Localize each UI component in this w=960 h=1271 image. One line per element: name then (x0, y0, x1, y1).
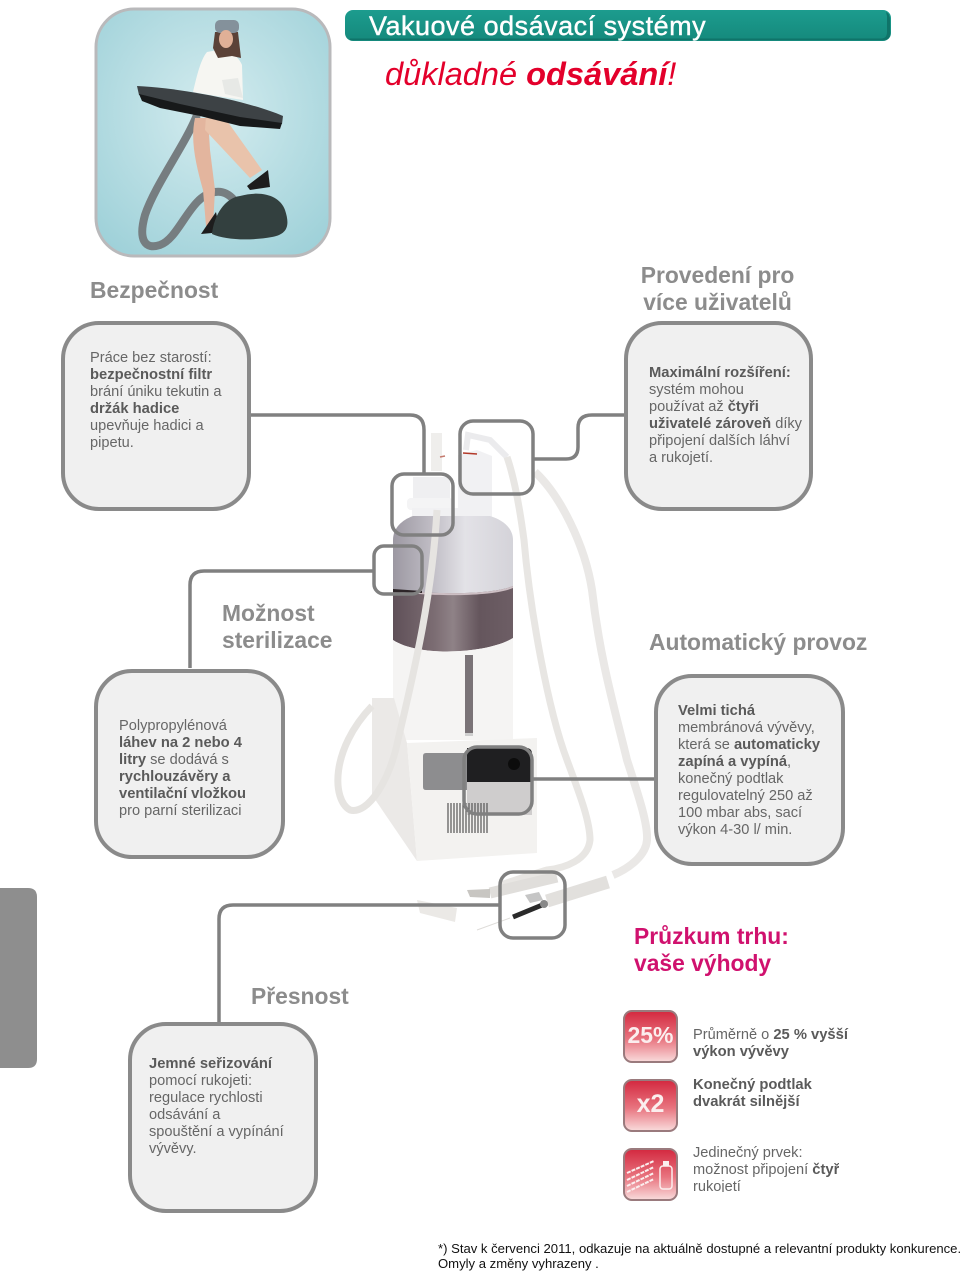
bottle liquid (393, 586, 513, 652)
text: Možnost sterilizace: láhev na 2 nebo 4 (119, 735, 242, 751)
text: Provedení: a rukojetí. (649, 450, 713, 466)
text: Přesnost: vývěvy. (149, 1141, 197, 1157)
heading: Průzkum trhu: Průzkum trhu: (634, 923, 789, 949)
footnote: *) Stav k červenci 2011, odkazuje na aktuálně dostupné a relevantní produkty konkurence. (438, 1241, 960, 1256)
bottle sleeve (393, 638, 513, 740)
text: Automatický provoz: výkon 4-30 l/ min. (678, 822, 792, 838)
text: benefit handles (693, 1145, 839, 1192)
text: benefit vacuum (693, 1077, 812, 1110)
text: Bezpečnost: bezpečnostní filtr (90, 367, 212, 383)
text: Automatický provoz: konečný podtlak (678, 771, 783, 787)
text: Automatický provoz: která se automaticky (678, 737, 820, 753)
text: Bezpečnost: pipetu. (90, 435, 134, 451)
tube: elbow (466, 435, 507, 457)
footnote: Omyly a změny vyhrazeny . (438, 1256, 599, 1271)
panel: Automatický provoz (654, 674, 845, 866)
text: Automatický provoz: 100 mbar abs, sací (678, 805, 802, 821)
tube: first line (500, 457, 590, 885)
panel: Provedení (624, 321, 813, 511)
heading: Možnost sterilizace (222, 600, 332, 652)
icon: x2: x2 (637, 1090, 664, 1118)
text: Možnost sterilizace: litry se dodává s (119, 752, 229, 768)
text: Provedení: Maximální rozšíření: (649, 365, 791, 381)
icon: 25 percent (624, 1011, 677, 1062)
text: Automatický provoz: zapíná a vypíná, (678, 754, 791, 770)
text: Provedení: systém mohou (649, 382, 744, 398)
subtitle: důkladné odsávání! (385, 56, 676, 92)
text: Možnost sterilizace: Polypropylénová (119, 718, 227, 734)
text: Přesnost: odsávání a (149, 1107, 220, 1123)
heading: Průzkum trhu (634, 923, 789, 976)
icon: four handles and bottle (624, 1149, 677, 1200)
bottle air (393, 516, 513, 597)
tube: left loop (338, 510, 437, 810)
title: Vakuové odsávací systémy (369, 11, 706, 41)
text: Automatický provoz: membránová vývěvy, (678, 720, 815, 736)
heading: Provedení pro více uživatelů: více uživatelů (643, 288, 792, 314)
text: Přesnost: Jemné seřizování (149, 1056, 272, 1072)
heading: Automatický provoz: Automatický provoz (649, 629, 867, 655)
connector lines and focus frames (190, 415, 654, 1022)
text: Přesnost: spouštění a vypínání (149, 1124, 284, 1140)
text: benefit handles: Jedinečný prvek: (693, 1145, 803, 1161)
heading: Provedení pro více uživatelů (641, 262, 794, 314)
bent leg (205, 116, 262, 178)
icon: 25 percent: 25% (627, 1022, 674, 1048)
text: benefit vacuum: Konečný podtlak (693, 1077, 812, 1093)
vacuum body (212, 194, 287, 239)
text: Provedení: používat až čtyři (649, 399, 759, 415)
title bar (345, 10, 891, 41)
text: Bezpečnost: brání úniku tekutin a (90, 384, 221, 400)
vacuum nozzle disc (137, 86, 283, 124)
text: Provedení: uživatelé zároveň díky (649, 416, 802, 432)
heading: Průzkum trhu: vaše výhody (634, 950, 771, 976)
handle with tip (417, 877, 608, 930)
text: Bezpečnost (90, 350, 222, 451)
tube: second line (535, 472, 647, 875)
text: Přesnost: regulace rychlosti (149, 1090, 263, 1106)
panel: Přesnost (128, 1022, 318, 1213)
text: Možnost sterilizace (119, 718, 246, 819)
text: Automatický provoz: Velmi tichá (678, 703, 755, 719)
heading: Možnost sterilizace: Možnost (222, 600, 315, 626)
text: Provedení (649, 365, 802, 466)
heading: Možnost sterilizace: sterilizace (222, 626, 332, 652)
product photo: suction bottle, pump, tubing (338, 433, 647, 930)
text: Možnost sterilizace: rychlouzávěry a (119, 769, 231, 785)
text: benefit 25 percent: výkon vývěvy (693, 1044, 789, 1060)
text: Automatický provoz (678, 703, 820, 838)
footnote (438, 1241, 960, 1271)
text: Bezpečnost: upevňuje hadici a (90, 418, 204, 434)
text: Provedení: připojení dalších láhví (649, 433, 790, 449)
photo: woman with vacuum cleaner (96, 9, 330, 256)
bottle caps and fittings (431, 433, 442, 471)
pump housing (372, 698, 417, 861)
heading: Přesnost: Přesnost (251, 983, 349, 1009)
side tab (0, 888, 37, 1068)
panel: Bezpečnost (61, 321, 251, 511)
text: Přesnost: pomocí rukojeti: (149, 1073, 252, 1089)
icon: x2 (624, 1080, 677, 1131)
hose (142, 115, 234, 246)
text: benefit vacuum: dvakrát silnější (693, 1094, 800, 1110)
text: Přesnost (149, 1056, 284, 1157)
standing leg (193, 118, 215, 226)
text: benefit 25 percent (693, 1027, 848, 1060)
text: benefit 25 percent: Průměrně o 25 % vyšší (693, 1027, 848, 1043)
text: benefit handles: možnost připojení čtyř (693, 1162, 839, 1178)
heading: Provedení pro více uživatelů: Provedení pro (641, 262, 794, 288)
panel: Možnost sterilizace (94, 669, 285, 859)
text: Možnost sterilizace: pro parní sterilizaci (119, 803, 241, 819)
text: Automatický provoz: regulovatelný 250 až (678, 788, 813, 804)
text: Bezpečnost: Práce bez starostí: (90, 350, 212, 366)
text: Možnost sterilizace: ventilační vložkou (119, 786, 246, 802)
text: Bezpečnost: držák hadice (90, 401, 179, 417)
shirt (193, 50, 243, 100)
heading: Bezpečnost: Bezpečnost (90, 277, 218, 303)
